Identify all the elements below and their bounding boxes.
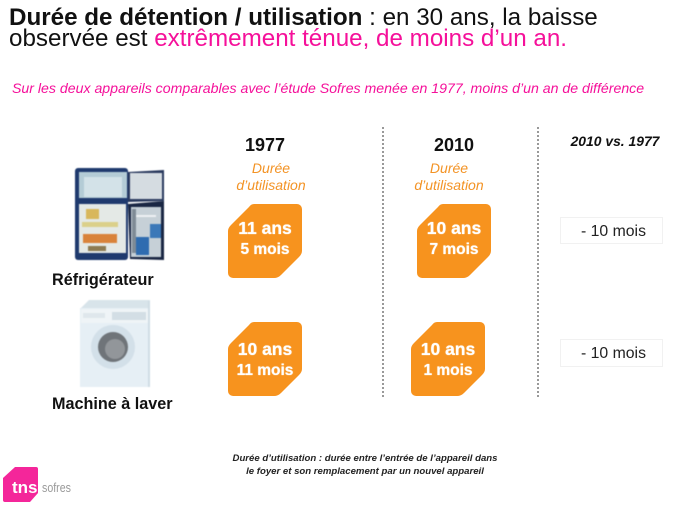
badge: washing machine 1977: 11 mois [237,362,293,379]
badge: washing machine 1977 [228,322,302,396]
icon: washing machine [80,300,150,388]
icon: refrigerator [74,167,165,261]
column label: 2010 duration: Durée [430,160,468,176]
column label: 1977 duration [236,160,306,193]
badge: refrigerator 2010: 10 ans [427,218,481,238]
title: Durée de détention / utilisation : en 30 ans, la baisse [9,4,598,31]
column heading: comparison: 2010 vs. 1977 [571,133,659,149]
badge: washing machine 2010 [411,322,485,396]
difference: washing machine: - 10 mois [581,345,646,362]
badge: refrigerator 1977: 5 mois [240,241,290,258]
title: observée est extrêmement ténue, de moins d’un an. [9,24,567,52]
badge: refrigerator 2010: 7 mois [429,241,479,258]
badge: washing machine 2010: 10 ans [421,339,475,359]
badge: refrigerator 1977: 11 ans [238,218,292,238]
badge: washing machine 1977: 10 ans [238,339,292,359]
subtitle: Sur les deux appareils comparables avec l’étude Sofres menée en 1977, moins d’un an de différence [12,80,644,96]
badge: refrigerator 1977 [228,204,302,278]
title [9,4,598,52]
column heading: 1977: 1977 [245,135,285,155]
label: refrigerator: Réfrigérateur [52,271,154,289]
logo: tns sofres [3,467,71,502]
column heading: 2010: 2010 [434,135,474,155]
footnote: Durée d’utilisation : durée entre l’entrée de l’appareil dans [233,453,497,464]
logo: tns sofres: sofres [42,481,71,495]
badge: washing machine 2010: 1 mois [423,362,473,379]
label: washing machine: Machine à laver [52,395,173,413]
footnote: le foyer et son remplacement par un nouvel appareil [246,466,484,476]
logo: tns sofres: tns [12,478,38,497]
difference: washing machine [560,339,663,367]
column label: 2010 duration [414,160,484,193]
badge: refrigerator 2010 [417,204,491,278]
column label: 1977 duration: Durée [252,160,290,176]
difference: refrigerator: - 10 mois [581,223,646,240]
footnote [232,453,498,476]
column label: 2010 duration: d’utilisation [414,177,484,193]
column label: 1977 duration: d’utilisation [236,177,306,193]
difference: refrigerator [560,217,663,244]
